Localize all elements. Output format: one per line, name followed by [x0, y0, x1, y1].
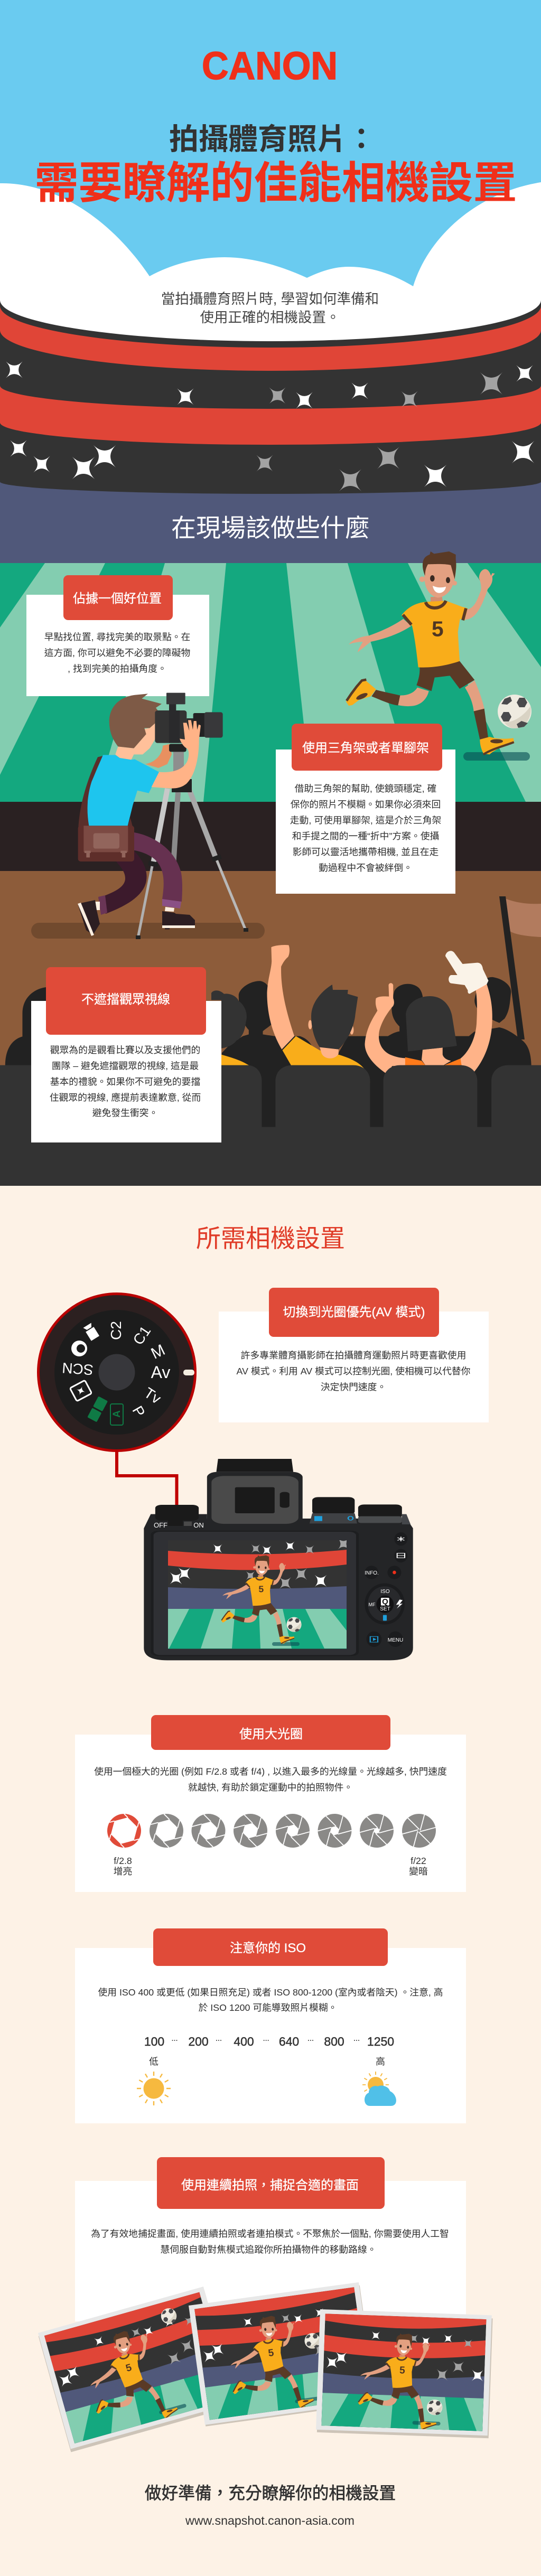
card: do not block: 觀眾為的是觀看比賽以及支援他們的	[50, 1044, 200, 1055]
flag	[499, 896, 541, 1039]
title line 2: 需要瞭解的佳能相機設置	[35, 158, 517, 208]
card: good position: 早點找位置, 尋找完美的取景點。在	[44, 632, 190, 642]
illustration: camera back: SET	[380, 1606, 390, 1612]
illustration: camera back: ON	[193, 1521, 204, 1529]
intro text: 使用正確的相機設置。	[200, 310, 340, 325]
mode dial: Tv	[141, 1384, 164, 1407]
card: tripod: 和手提之間的一種“折中”方案。使攝	[292, 831, 439, 841]
card: ISO: 高	[376, 2056, 385, 2067]
card: tripod	[276, 724, 455, 894]
illustration: camera back	[144, 1459, 413, 1660]
card: do not block: 基本的禮貌。如果你不可避免的要擋	[50, 1076, 200, 1087]
illustration: camera back: Q	[382, 1597, 388, 1606]
ISO scale: ···	[307, 2036, 314, 2044]
illustration: crowd and seats	[0, 945, 541, 1127]
card: wide aperture	[75, 1715, 466, 1892]
card: do not block: 團隊 – 避免遮擋觀眾的視線, 這是最	[52, 1061, 199, 1071]
card: wide aperture: f/2.8	[114, 1856, 132, 1866]
title line 1: 拍攝體育照片：	[169, 123, 376, 156]
card: continuous shooting: 慧伺服自動對焦模式追蹤你所拍攝物件的移動路線。	[161, 2244, 376, 2255]
card: wide aperture: 就越快, 有助於鎖定運動中的拍照物件。	[188, 1782, 353, 1793]
card: tripod: 走動, 可使用單腳架, 這是介於三角架	[290, 815, 441, 826]
logo: CANON	[202, 44, 338, 88]
closing line: 做好準備，充分瞭解你的相機設置	[145, 2484, 396, 2503]
card: continuous shooting: 使用連續拍照，捕捉合適的畫面	[181, 2178, 359, 2193]
section heading: camera settings: 所需相機設置	[196, 1224, 345, 1252]
card: ISO: 低	[149, 2056, 158, 2067]
panel: football field	[0, 563, 541, 1135]
ISO scale: 800	[324, 2035, 344, 2048]
aperture scale	[104, 1810, 440, 1851]
card: wide aperture: 變暗	[409, 1866, 428, 1877]
card: good position: 這方面, 你可以避免不必要的障礙物	[44, 648, 190, 658]
icon: sun behind cloud	[362, 2072, 396, 2106]
stand floor	[0, 1127, 541, 1186]
card: tripod: 借助三角架的幫助, 使鏡頭穩定, 確	[295, 783, 436, 794]
card: do not block: 不遮擋觀眾視線	[81, 992, 170, 1007]
photographer shadow	[31, 923, 265, 939]
card: tripod: 保你的照片不模糊。如果你必須來回	[291, 799, 441, 810]
card: AV mode: 許多專業體育攝影師在拍攝體育運動照片時更喜歡使用	[241, 1350, 466, 1361]
illustration: crowd left	[5, 987, 46, 1065]
ISO scale: 640	[279, 2035, 299, 2048]
card: wide aperture: 增亮	[114, 1866, 132, 1877]
card: wide aperture: f/22	[411, 1856, 426, 1866]
ISO scale: 1250	[367, 2035, 394, 2048]
card: ISO	[75, 1928, 466, 2123]
card: do not block: 避免發生衝突。	[92, 1108, 158, 1118]
slate band	[0, 465, 541, 563]
ISO scale	[144, 2035, 394, 2048]
ISO scale: ···	[263, 2036, 269, 2044]
ISO scale: ···	[353, 2036, 360, 2044]
illustration: football player	[346, 551, 514, 754]
stadium stands	[0, 296, 541, 494]
card: good position: , 找到完美的拍攝角度。	[68, 663, 167, 674]
card: AV mode: 切換到光圈優先(AV 模式)	[283, 1305, 425, 1319]
connector line	[117, 1450, 176, 1505]
ISO scale: ···	[171, 2036, 178, 2044]
illustration: camera back: ISO	[380, 1589, 390, 1595]
ISO scale: 100	[144, 2035, 164, 2048]
white cloud	[0, 182, 541, 341]
mode dial: A	[111, 1410, 123, 1418]
card: good position: 佔據一個好位置	[73, 592, 162, 606]
intro text: 當拍攝體育照片時, 學習如何準備和	[161, 291, 379, 307]
intro text	[161, 291, 379, 325]
card: do not block: 住觀眾的視線, 應提前表達歉意, 從而	[50, 1092, 201, 1103]
card: tripod: 影師可以靈活地攜帶相機, 並且在走	[293, 847, 439, 857]
panel: sky hero	[0, 0, 541, 475]
mode dial: C2	[108, 1321, 124, 1340]
player shadow	[463, 752, 530, 761]
ISO scale: 200	[188, 2035, 209, 2048]
photo 3	[316, 2309, 493, 2438]
mode dial: SCN	[61, 1360, 94, 1378]
photo 2	[189, 2282, 376, 2427]
ISO scale: ···	[216, 2036, 222, 2044]
illustration: camera back: MENU	[388, 1637, 403, 1643]
mode dial: C1	[130, 1323, 154, 1348]
card: AV mode	[219, 1288, 489, 1422]
card: do not block	[31, 967, 221, 1142]
illustration: photographer	[78, 693, 248, 939]
card: ISO: 注意你的 ISO	[230, 1941, 306, 1955]
section heading: on site: 在現場該做些什麼	[171, 514, 370, 542]
mode dial	[38, 1294, 195, 1450]
illustration: camera back: INFO.	[365, 1570, 379, 1576]
card: tripod: 動過程中不會被絆倒。	[319, 863, 413, 873]
icon: sun	[137, 2072, 171, 2105]
camera screen	[168, 1540, 347, 1649]
card: good position	[26, 575, 209, 696]
card: continuous shooting	[75, 2157, 466, 2321]
illustration: camera back: OFF	[154, 1521, 167, 1529]
website: www.snapshot.canon-asia.com	[185, 2514, 355, 2527]
card: AV mode: AV 模式。利用 AV 模式可以控制光圈, 使相機可以代替你	[237, 1366, 471, 1376]
illustration: camera back: MF	[369, 1602, 376, 1607]
mode dial: M	[148, 1341, 168, 1363]
photo 1	[38, 2287, 208, 2452]
football	[498, 695, 531, 728]
ISO scale: 400	[234, 2035, 254, 2048]
stadium lights	[0, 353, 541, 502]
card: tripod: 使用三角架或者單腳架	[302, 741, 429, 755]
card: wide aperture: 使用一個極大的光圈 (例如 F/2.8 或者 f/4) , 以進入最多的光線量。光線越多, 快門速度	[94, 1766, 447, 1777]
card: continuous shooting: 為了有效地捕捉畫面, 使用連續拍照或者連拍模式。不聚焦於一個點, 你需要使用人工智	[91, 2228, 449, 2239]
mode dial: Av	[151, 1363, 170, 1382]
card: ISO: 於 ISO 1200 可能導致照片模糊。	[199, 2002, 337, 2013]
mode dial: P	[129, 1403, 148, 1420]
card: wide aperture: 使用大光圈	[239, 1727, 303, 1741]
card: AV mode: 決定快門速度。	[321, 1382, 386, 1392]
card: ISO: 使用 ISO 400 或更低 (如果日照充足) 或者 ISO 800-1200 (室內或者陰天) 。注意, 高	[98, 1987, 443, 1998]
